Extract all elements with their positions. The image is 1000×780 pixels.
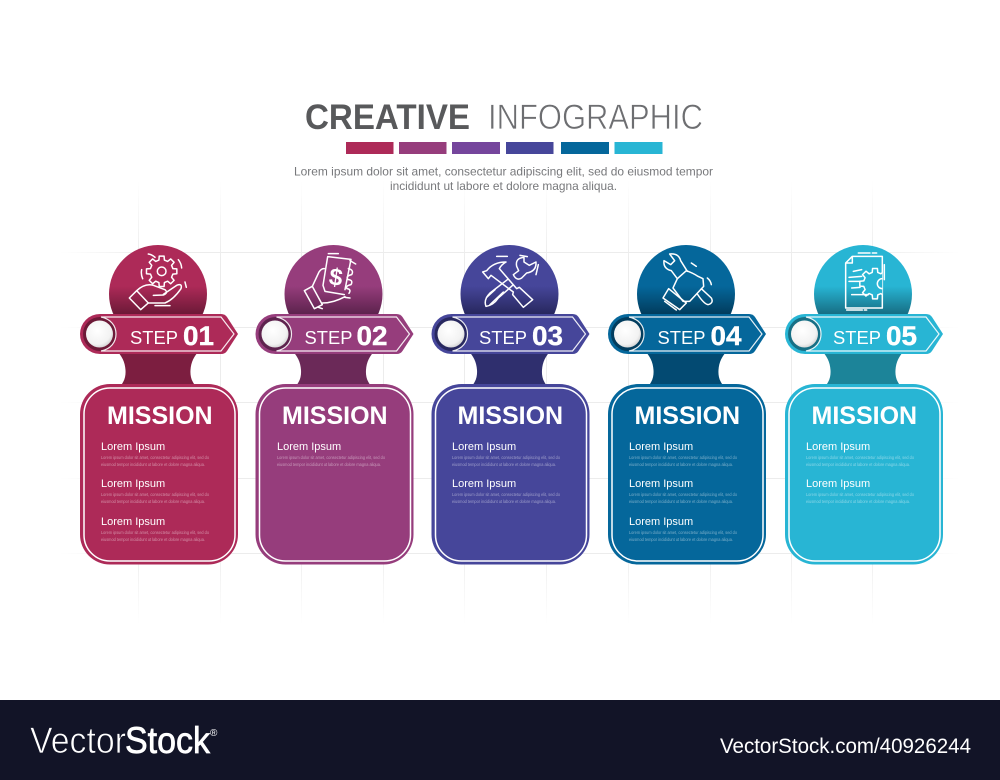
- item 1: eiusmod tempor incididunt ut labore et dolore magna aliqua.: [101, 462, 205, 467]
- title: [305, 98, 703, 137]
- connector neck: [468, 350, 552, 390]
- item 2: eiusmod tempor incididunt ut labore et dolore magna aliqua.: [452, 499, 556, 504]
- icon: hand holding phone with dollar: $: [327, 263, 344, 292]
- mission text: step 01: MISSION: [107, 402, 213, 430]
- item 2: eiusmod tempor incididunt ut labore et dolore magna aliqua.: [101, 499, 205, 504]
- panel: step 03: [432, 245, 590, 564]
- item 3: [629, 516, 737, 542]
- item 1: Lorem Ipsum: [806, 441, 870, 453]
- intro text: incididunt ut labore et dolore magna aliqua.: [390, 179, 617, 193]
- item 1: eiusmod tempor incididunt ut labore et dolore magna aliqua.: [806, 462, 910, 467]
- item 1: Lorem Ipsum: [277, 441, 341, 453]
- item 2: Lorem Ipsum: [452, 478, 516, 490]
- item 1: Lorem ipsum dolor sit amet, consectetur adipiscing elit, sed do: [629, 455, 737, 460]
- item 1: [629, 441, 737, 467]
- connector neck: [116, 350, 200, 390]
- footer logo: Stock: [125, 720, 210, 761]
- item 1: Lorem ipsum dolor sit amet, consectetur adipiscing elit, sed do: [806, 455, 914, 460]
- panel: step 01: STEP: [130, 327, 178, 348]
- icon: hand holding phone with dollar: [304, 254, 356, 309]
- item 1: [277, 441, 385, 467]
- footer bar: [0, 700, 1000, 780]
- mission text: step 03: [452, 402, 563, 504]
- icon circle: [814, 245, 912, 343]
- connector neck: [821, 350, 905, 390]
- mission text: step 05: [806, 402, 917, 504]
- item 1: Lorem Ipsum: [101, 441, 165, 453]
- panel: step 05: STEP: [833, 327, 881, 348]
- icon circle: [460, 245, 558, 343]
- item 1: [101, 441, 209, 467]
- item 3: eiusmod tempor incididunt ut labore et dolore magna aliqua.: [101, 537, 205, 542]
- item 2: Lorem ipsum dolor sit amet, consectetur adipiscing elit, sed do: [452, 492, 560, 497]
- icon: fist holding wrench: [663, 254, 712, 310]
- footer logo: Vector: [30, 720, 126, 761]
- item 1: Lorem Ipsum: [452, 441, 516, 453]
- item 1: eiusmod tempor incididunt ut labore et dolore magna aliqua.: [452, 462, 556, 467]
- title: INFOGRAPHIC: [488, 98, 703, 137]
- mission text: step 02: [277, 402, 388, 467]
- item 2: Lorem ipsum dolor sit amet, consectetur adipiscing elit, sed do: [101, 492, 209, 497]
- item 2: Lorem Ipsum: [806, 478, 870, 490]
- panel: step 04: [608, 245, 766, 564]
- icon circle: [637, 245, 735, 343]
- step banner: [80, 314, 238, 354]
- item 1: eiusmod tempor incididunt ut labore et dolore magna aliqua.: [277, 462, 381, 467]
- mission card: [608, 384, 766, 564]
- item 2: Lorem ipsum dolor sit amet, consectetur adipiscing elit, sed do: [629, 492, 737, 497]
- item 1: Lorem ipsum dolor sit amet, consectetur adipiscing elit, sed do: [277, 455, 385, 460]
- item 2: eiusmod tempor incididunt ut labore et dolore magna aliqua.: [806, 499, 910, 504]
- title: CREATIVE: [305, 98, 470, 137]
- item 2: Lorem Ipsum: [629, 478, 693, 490]
- item 1: eiusmod tempor incididunt ut labore et dolore magna aliqua.: [629, 462, 733, 467]
- panel: step 04: STEP: [658, 327, 706, 348]
- item 1: Lorem Ipsum: [629, 441, 693, 453]
- mission text: step 02: MISSION: [282, 402, 388, 430]
- item 2: Lorem ipsum dolor sit amet, consectetur adipiscing elit, sed do: [806, 492, 914, 497]
- item 3: [101, 516, 209, 542]
- item 3: Lorem Ipsum: [629, 516, 693, 528]
- item 3: eiusmod tempor incididunt ut labore et dolore magna aliqua.: [629, 537, 733, 542]
- footer id: VectorStock.com/40926244: [720, 735, 971, 758]
- item 2: [806, 478, 914, 504]
- step banner: [432, 314, 590, 354]
- footer logo: [30, 720, 218, 761]
- panel: step 04: 04: [710, 321, 742, 351]
- item 1: Lorem ipsum dolor sit amet, consectetur adipiscing elit, sed do: [452, 455, 560, 460]
- panel: step 02: [256, 245, 414, 564]
- icon circle: [109, 245, 207, 343]
- panel: step 02: STEP: [304, 327, 352, 348]
- icon circle: [284, 245, 382, 343]
- item 3: Lorem Ipsum: [101, 516, 165, 528]
- mission text: step 01: [101, 402, 213, 542]
- step banner: [608, 314, 766, 354]
- item 2: Lorem Ipsum: [101, 478, 165, 490]
- item 2: [452, 478, 560, 504]
- panel: step 05: [785, 245, 943, 564]
- mission text: step 03: MISSION: [458, 402, 563, 430]
- connector neck: [644, 350, 728, 390]
- mission text: step 04: MISSION: [634, 402, 740, 430]
- step banner: [256, 314, 414, 354]
- panel: step 05: 05: [886, 321, 917, 351]
- intro text: [294, 164, 713, 193]
- mission card: [785, 384, 943, 564]
- item 2: eiusmod tempor incididunt ut labore et dolore magna aliqua.: [629, 499, 733, 504]
- colour bars: [346, 142, 662, 154]
- mission text: step 04: [629, 402, 740, 542]
- item 1: [806, 441, 914, 467]
- panel: step 03: 03: [532, 321, 563, 351]
- mission card: [80, 384, 238, 564]
- item 2: [101, 478, 209, 504]
- step banner: [785, 314, 943, 354]
- item 1: Lorem ipsum dolor sit amet, consectetur adipiscing elit, sed do: [101, 455, 209, 460]
- footer logo: ®: [210, 728, 218, 739]
- item 2: [629, 478, 737, 504]
- item 1: [452, 441, 560, 467]
- mission text: step 05: MISSION: [812, 402, 917, 430]
- item 3: Lorem ipsum dolor sit amet, consectetur adipiscing elit, sed do: [629, 530, 737, 535]
- item 3: Lorem ipsum dolor sit amet, consectetur adipiscing elit, sed do: [101, 530, 209, 535]
- mission card: [432, 384, 590, 564]
- icon: hand holding gear: [129, 254, 186, 310]
- mission card: [256, 384, 414, 564]
- icon: document with gear: [846, 253, 890, 310]
- panel: step 03: STEP: [479, 327, 527, 348]
- intro text: Lorem ipsum dolor sit amet, consectetur adipiscing elit, sed do eiusmod tempor: [294, 164, 713, 178]
- connector neck: [292, 350, 376, 390]
- icon: hammer and wrench: [483, 255, 538, 307]
- panel: step 01: [80, 245, 238, 564]
- panel: step 02: 02: [356, 321, 388, 351]
- panel: step 01: 01: [183, 321, 214, 351]
